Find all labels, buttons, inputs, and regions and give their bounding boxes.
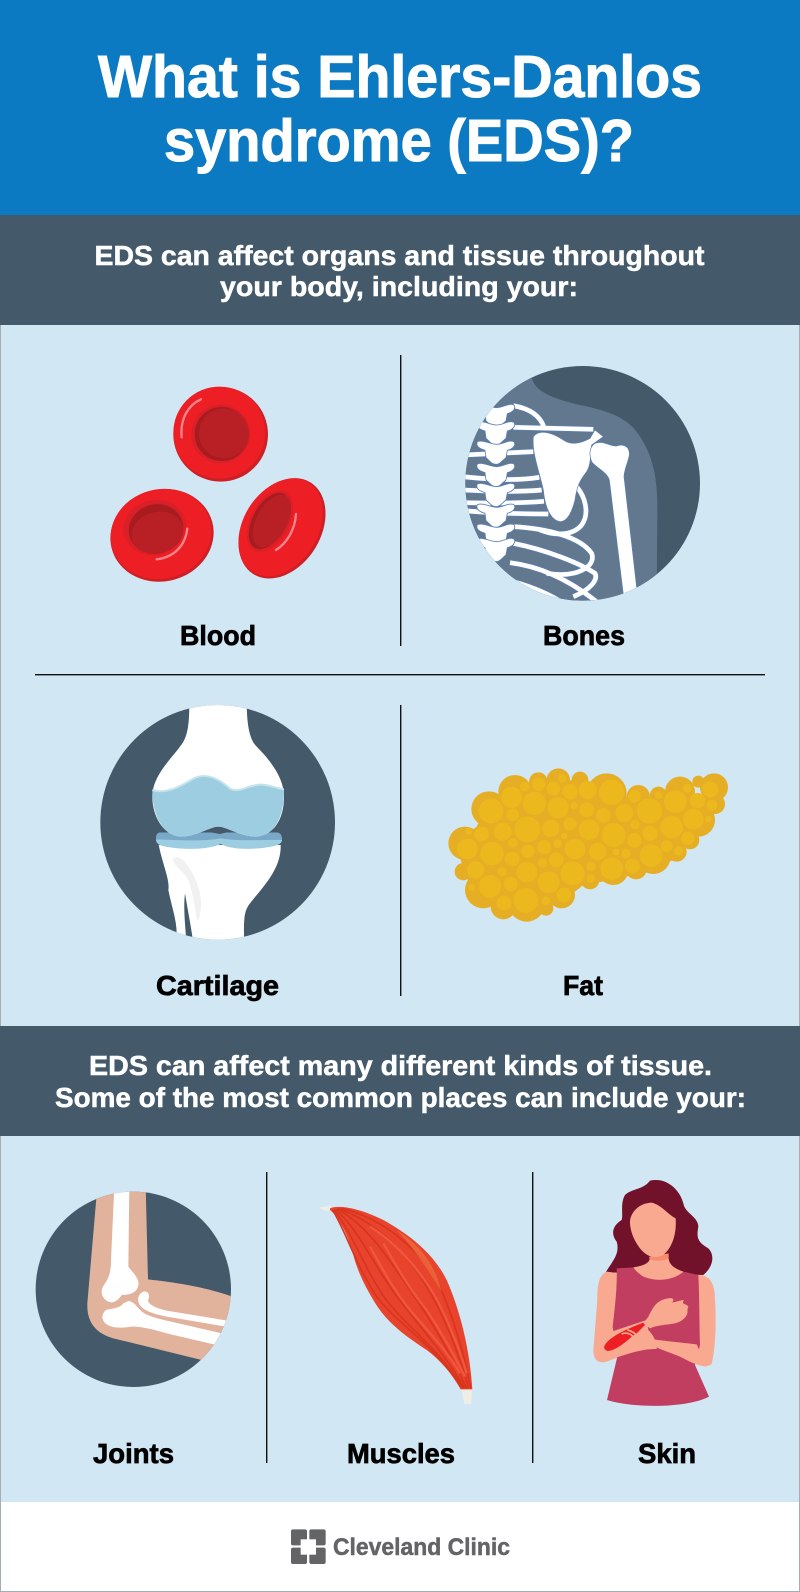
icon: fat tissue (448, 768, 728, 922)
icon: logo mark (291, 1529, 326, 1564)
title banner (0, 0, 800, 215)
logo wordmark: Cleveland Clinic (333, 1534, 510, 1561)
label: Bones: Bones (543, 620, 625, 651)
label: Fat: Fat (563, 970, 603, 1001)
section heading: organs and tissue: EDS can affect organs and tissue throughout (94, 240, 704, 271)
panel: organs and tissue (0, 325, 800, 1026)
icon: muscle (319, 1206, 472, 1404)
footer: Cleveland Clinic logo (0, 1502, 800, 1592)
label: Skin: Skin (638, 1438, 696, 1469)
icon: shoulder bones (465, 366, 700, 601)
section heading: organs and tissue: your body, including your: (220, 271, 578, 302)
icon: elbow joint (36, 1187, 240, 1387)
label: Blood: Blood (180, 620, 256, 651)
icon: woman with skin rash (593, 1180, 716, 1406)
title: What is Ehlers-Danlos (98, 44, 702, 110)
title (98, 44, 702, 174)
title: syndrome (EDS)? (164, 108, 634, 174)
label: Cartilage: Cartilage (156, 970, 279, 1001)
section heading: common places (0, 1026, 800, 1136)
section heading: organs and tissue (0, 215, 800, 325)
icon: red blood cells (100, 387, 343, 595)
label: Muscles: Muscles (347, 1438, 455, 1469)
section heading: common places: Some of the most common places can include your: (55, 1082, 746, 1113)
label: Joints: Joints (93, 1438, 174, 1469)
section heading: common places: EDS can affect many different kinds of tissue. (89, 1050, 712, 1081)
panel: common places (0, 1136, 800, 1502)
icon: knee cartilage (100, 700, 335, 943)
